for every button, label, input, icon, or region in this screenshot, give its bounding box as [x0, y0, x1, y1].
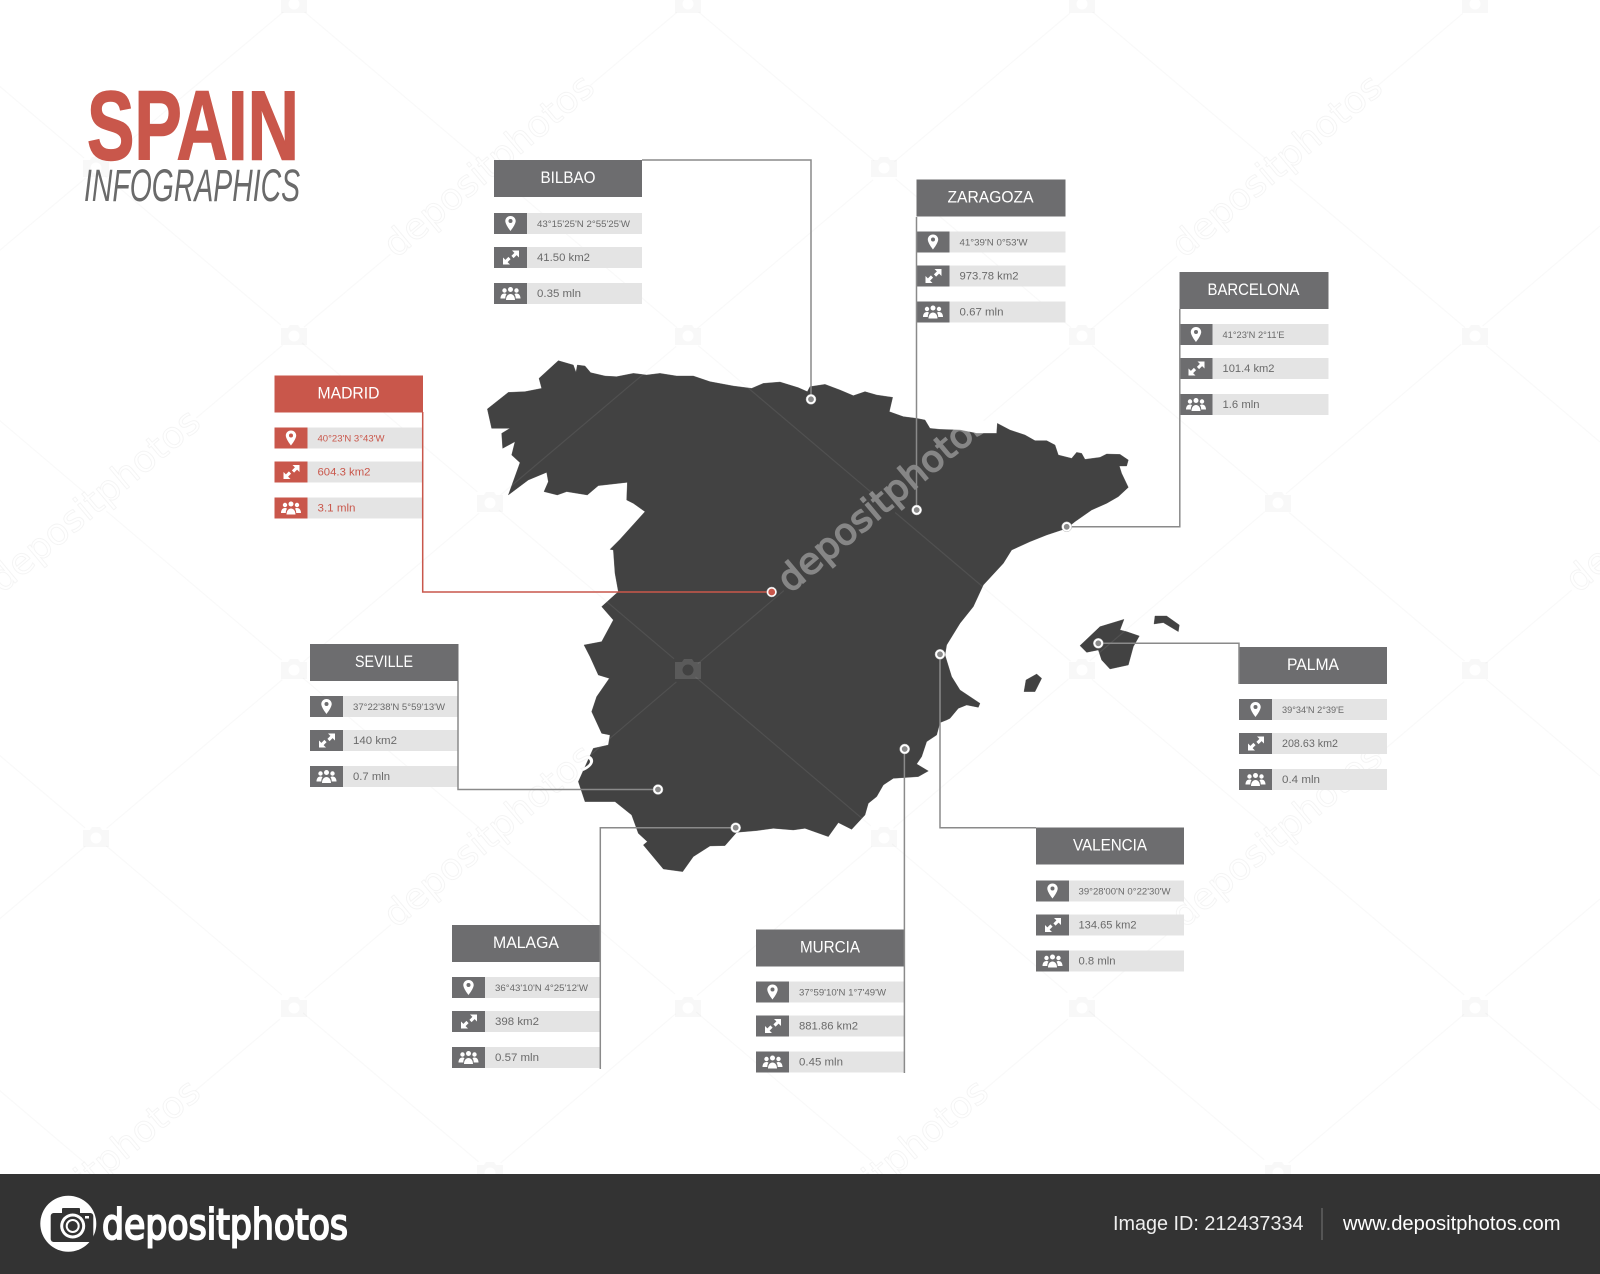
card: Seville: 140 km2 [353, 735, 397, 747]
card: Madrid: MADRID [318, 384, 380, 402]
card: Bilbao: 41.50 km2 [537, 252, 590, 264]
connector: Murcia [900, 744, 910, 1073]
card: Bilbao: BILBAO [540, 169, 596, 187]
card: Zaragoza: 0.67 mln [960, 306, 1004, 318]
footer logo [40, 1196, 348, 1252]
card: Barcelona: 1.6 mln [1222, 399, 1260, 411]
card: Murcia: 37°59'10'N 1°7'49'W [799, 988, 886, 998]
card: Seville: SEVILLE [355, 653, 413, 671]
connector: Seville [458, 681, 663, 794]
card: Malaga: 0.57 mln [495, 1052, 539, 1064]
card: Palma [1239, 647, 1387, 790]
connector: Madrid [423, 412, 777, 597]
faint text watermarks: depositphotos [376, 736, 603, 936]
card: Barcelona: BARCELONA [1208, 281, 1300, 299]
card: Valencia: 134.65 km2 [1078, 919, 1136, 931]
card: Madrid: 3.1 mln [318, 502, 356, 514]
center watermark over map: depositphotos [770, 401, 997, 601]
card: Palma: 208.63 km2 [1282, 738, 1338, 750]
card: Madrid: 604.3 km2 [318, 466, 370, 478]
card: Valencia: 39°28'00'N 0°22'30'W [1078, 886, 1171, 898]
card: Valencia: 0.8 mln [1078, 955, 1116, 967]
card: Bilbao: 0.35 mln [537, 288, 581, 300]
connector: Malaga [600, 823, 741, 1069]
card: Zaragoza: ZARAGOZA [948, 188, 1034, 206]
card: Seville: 37°22'38'N 5°59'13'W [353, 702, 445, 713]
title: INFOGRAPHICS [84, 160, 300, 211]
card: Barcelona: 41°23'N 2°11'E [1222, 330, 1284, 341]
footer bar [0, 1174, 1600, 1274]
image id: Image ID: 212437334 [1113, 1212, 1304, 1235]
faint text watermarks: depositphotos [376, 66, 603, 266]
faint text watermarks: depositphotos [1164, 736, 1391, 936]
card: Malaga: 398 km2 [495, 1016, 539, 1028]
divider [1322, 1208, 1323, 1240]
card: Bilbao: 43°15'25'N 2°55'25'W [537, 219, 630, 230]
card: Palma: 0.4 mln [1282, 774, 1320, 786]
card: Seville: 0.7 mln [353, 771, 390, 783]
card: Malaga [452, 925, 600, 1068]
card: Malaga: 36°43'10'N 4°25'12'W [495, 983, 588, 994]
card: Seville [310, 644, 458, 787]
map of Spain [487, 361, 1179, 872]
card: Valencia [1036, 828, 1184, 972]
card: Palma: 39°34'N 2°39'E [1282, 705, 1344, 716]
website: www.depositphotos.com [1342, 1212, 1560, 1235]
faint text watermarks: depositphotos [1164, 66, 1391, 266]
title: SPAIN [87, 70, 299, 180]
card: Zaragoza: 973.78 km2 [960, 270, 1018, 282]
card: Madrid [274, 376, 423, 518]
card: Murcia: MURCIA [800, 938, 860, 956]
card: Barcelona [1180, 272, 1328, 415]
faint text watermarks: depositphotos [770, 1071, 997, 1271]
camera watermark on map [675, 659, 701, 679]
connector: Palma [1093, 638, 1239, 684]
card: Murcia: 0.45 mln [799, 1056, 843, 1068]
card: Valencia: VALENCIA [1073, 836, 1147, 854]
card: Bilbao [494, 160, 642, 304]
card: Palma: PALMA [1287, 656, 1339, 674]
connector: Valencia [935, 649, 1036, 828]
title [84, 70, 300, 211]
footer logo: depositphotos [102, 1200, 348, 1249]
card: Murcia [756, 930, 904, 1072]
card: Malaga: MALAGA [493, 934, 559, 952]
card: Madrid: 40°23'N 3°43'W [318, 434, 385, 444]
card: Murcia: 881.86 km2 [799, 1020, 858, 1032]
connector: Barcelona [1062, 309, 1180, 532]
card: Zaragoza [916, 180, 1066, 322]
connector: Bilbao [642, 160, 816, 404]
card: Zaragoza: 41°39'N 0°53'W [960, 238, 1028, 248]
card: Barcelona: 101.4 km2 [1222, 363, 1274, 375]
connector: Zaragoza [912, 217, 922, 515]
